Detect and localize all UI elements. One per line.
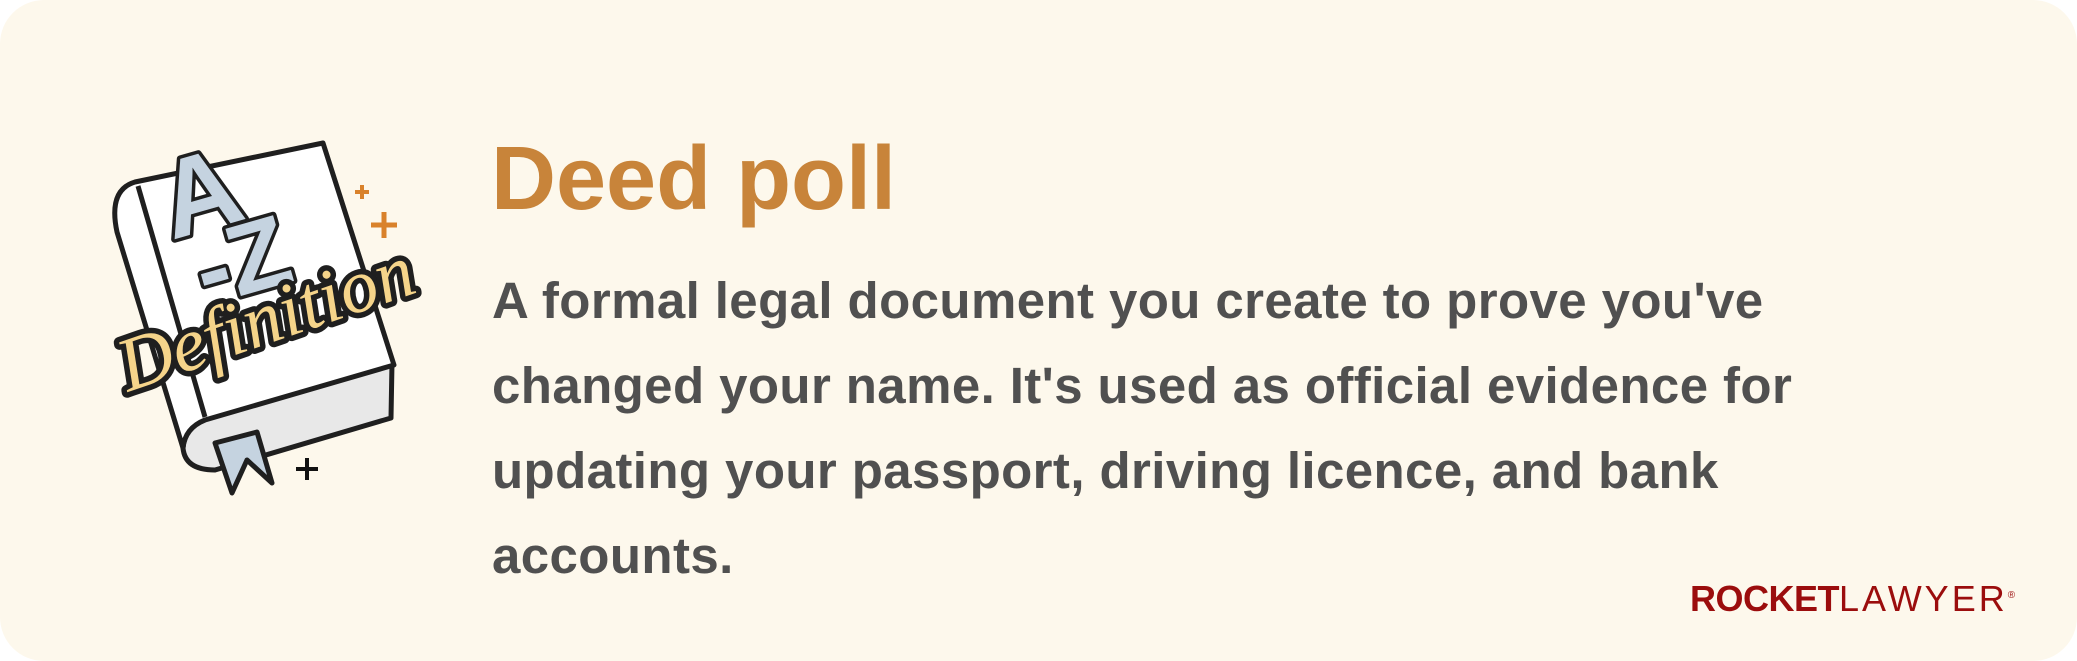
icon: A-Z definition book — [105, 123, 425, 496]
logo: ROCKETLAWYER® — [1690, 578, 2015, 619]
definition text: accounts. — [492, 527, 734, 584]
title: Deed poll — [491, 129, 896, 229]
plus signs — [355, 185, 397, 238]
page block — [183, 363, 392, 470]
definition text: A formal legal document you create to prove you've — [492, 272, 1764, 329]
letters A - Z: A — [145, 123, 255, 263]
definition text: updating your passport, driving licence, and bank — [492, 442, 1719, 499]
bookmark — [215, 432, 272, 493]
definition text: changed your name. It's used as official evidence for — [492, 357, 1792, 414]
cover — [115, 143, 394, 448]
definition text — [492, 272, 1792, 584]
letters A - Z: -Z — [181, 193, 303, 327]
letters A - Z — [145, 123, 303, 327]
definition script: Definition — [105, 228, 425, 408]
